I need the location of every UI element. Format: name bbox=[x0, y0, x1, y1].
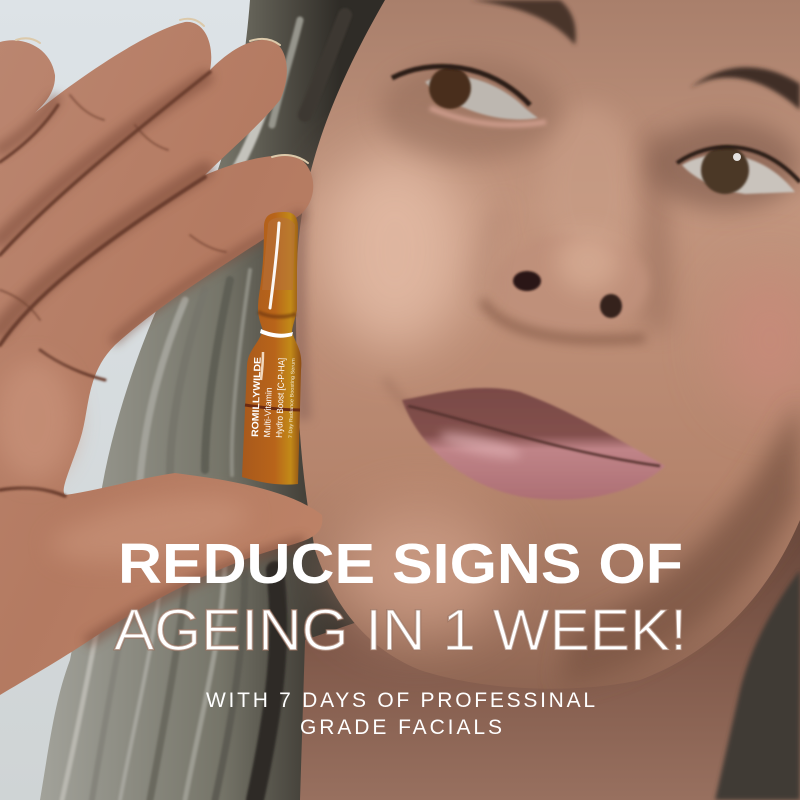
palm glow bbox=[0, 360, 75, 480]
headline bbox=[114, 532, 687, 663]
headline line 1: REDUCE SIGNS OF bbox=[118, 532, 683, 596]
ampoule constriction bbox=[258, 312, 296, 317]
ampoule bbox=[242, 212, 301, 485]
right eyebrow bbox=[690, 67, 800, 110]
nose bbox=[481, 105, 659, 340]
right eye bbox=[650, 120, 800, 210]
finger creases bbox=[0, 72, 226, 496]
nostril left bbox=[513, 271, 541, 291]
fingernail highlights bbox=[16, 19, 308, 163]
hair right bbox=[715, 570, 800, 800]
ampoule label: 7 Day Radiance Boosting Serum bbox=[288, 358, 297, 438]
jaw shadow bbox=[560, 400, 800, 685]
lower cheek glow bbox=[335, 505, 505, 635]
ampoule white band bbox=[260, 329, 293, 338]
subheading bbox=[206, 689, 595, 739]
ampoule label bbox=[250, 357, 297, 438]
subheading line 1: WITH 7 DAYS OF PROFESSINAL bbox=[206, 689, 595, 712]
right cheek tone bbox=[720, 270, 800, 410]
ampoule label: Hydro Boost [C-P-HA] bbox=[274, 358, 287, 438]
thumb highlight bbox=[47, 485, 253, 575]
neck bbox=[300, 470, 800, 800]
hand bbox=[0, 19, 322, 695]
left eyebrow bbox=[470, 0, 576, 45]
face bbox=[296, 0, 800, 689]
ampoule label: Multi-Vitamin bbox=[262, 387, 274, 438]
ampoule label: ROMILLYWILDE bbox=[250, 357, 264, 437]
mouth shading bbox=[385, 378, 412, 408]
nostril right bbox=[600, 294, 622, 318]
headline line 2: AGEING IN 1 WEEK! bbox=[114, 598, 687, 663]
ampoule liquid line bbox=[245, 405, 300, 410]
cheek edge shade bbox=[299, 170, 304, 420]
hair left bbox=[40, 0, 420, 800]
cheek highlight bbox=[320, 150, 470, 350]
lips bbox=[402, 388, 665, 500]
finger shading bbox=[0, 78, 300, 640]
ampoule glass neck shading bbox=[262, 217, 295, 290]
subheading line 2: GRADE FACIALS bbox=[300, 716, 502, 739]
ampoule highlights bbox=[270, 223, 279, 308]
left eye bbox=[380, 60, 560, 160]
